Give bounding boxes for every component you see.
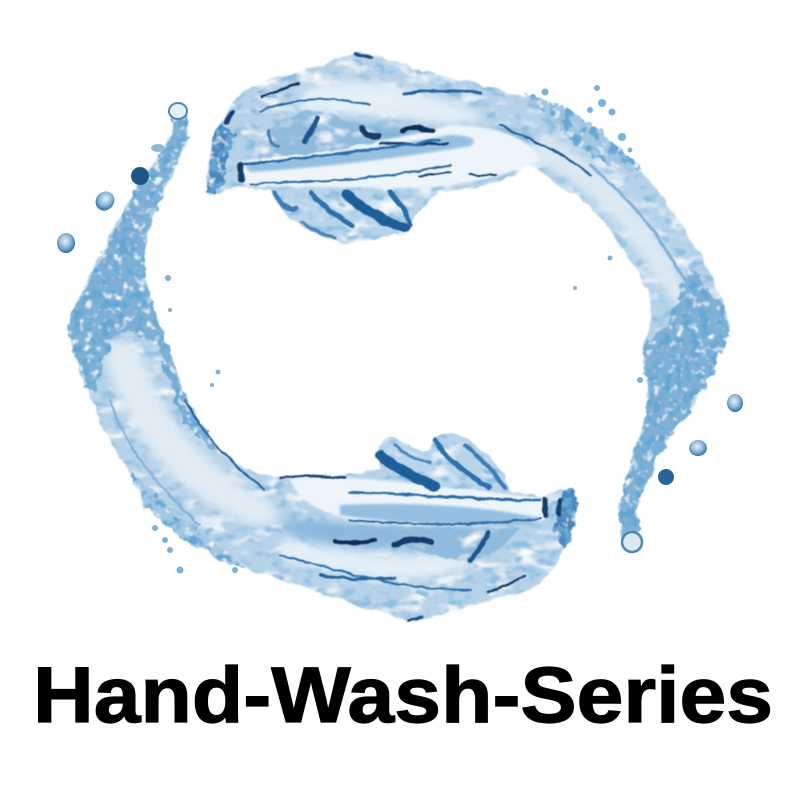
droplet tip (169, 103, 187, 119)
top water hand (208, 52, 729, 552)
lower arm highlight (280, 540, 470, 580)
mid-blue body band (290, 120, 540, 166)
splash texture: right edge (620, 265, 729, 552)
splash texture: inner left (150, 300, 218, 452)
splash texture: left edge (68, 105, 188, 395)
thumb (240, 125, 540, 188)
left cupped palm edge (208, 122, 233, 195)
finger shading (275, 192, 410, 238)
mid-blue body band (285, 519, 500, 547)
title: Hand-Wash-Series (33, 650, 773, 739)
bottom arm sweep left side: base (69, 105, 576, 622)
droplet bottom tip (622, 532, 642, 552)
droplet left (57, 233, 75, 253)
pale water body (105, 341, 278, 526)
top arm sweep right side: base (208, 52, 729, 552)
dark droplet right (658, 469, 674, 485)
pale water body (525, 130, 686, 310)
right cupped palm edge (554, 490, 577, 548)
fingers lower knuckles (395, 526, 520, 561)
thumb blue band (340, 504, 540, 525)
thumb (290, 477, 545, 526)
side splash (151, 144, 165, 152)
droplet lower right (689, 440, 707, 456)
small splashes (152, 85, 643, 574)
finger shading (380, 440, 505, 488)
bottom water hand (68, 105, 577, 622)
splash texture: bottom-left (130, 470, 250, 570)
droplet right (727, 394, 743, 412)
water droplets (57, 85, 743, 574)
dark streaks (110, 400, 560, 620)
fingers lower (272, 190, 410, 243)
dark streaks (226, 54, 690, 290)
droplet upper left (92, 188, 118, 214)
splash texture: shoulder (525, 95, 640, 170)
fingers top (258, 111, 385, 160)
upper arm highlight (300, 81, 481, 125)
fingers upper (376, 433, 510, 492)
thumb blue band (245, 135, 474, 172)
dark droplet (131, 167, 149, 185)
